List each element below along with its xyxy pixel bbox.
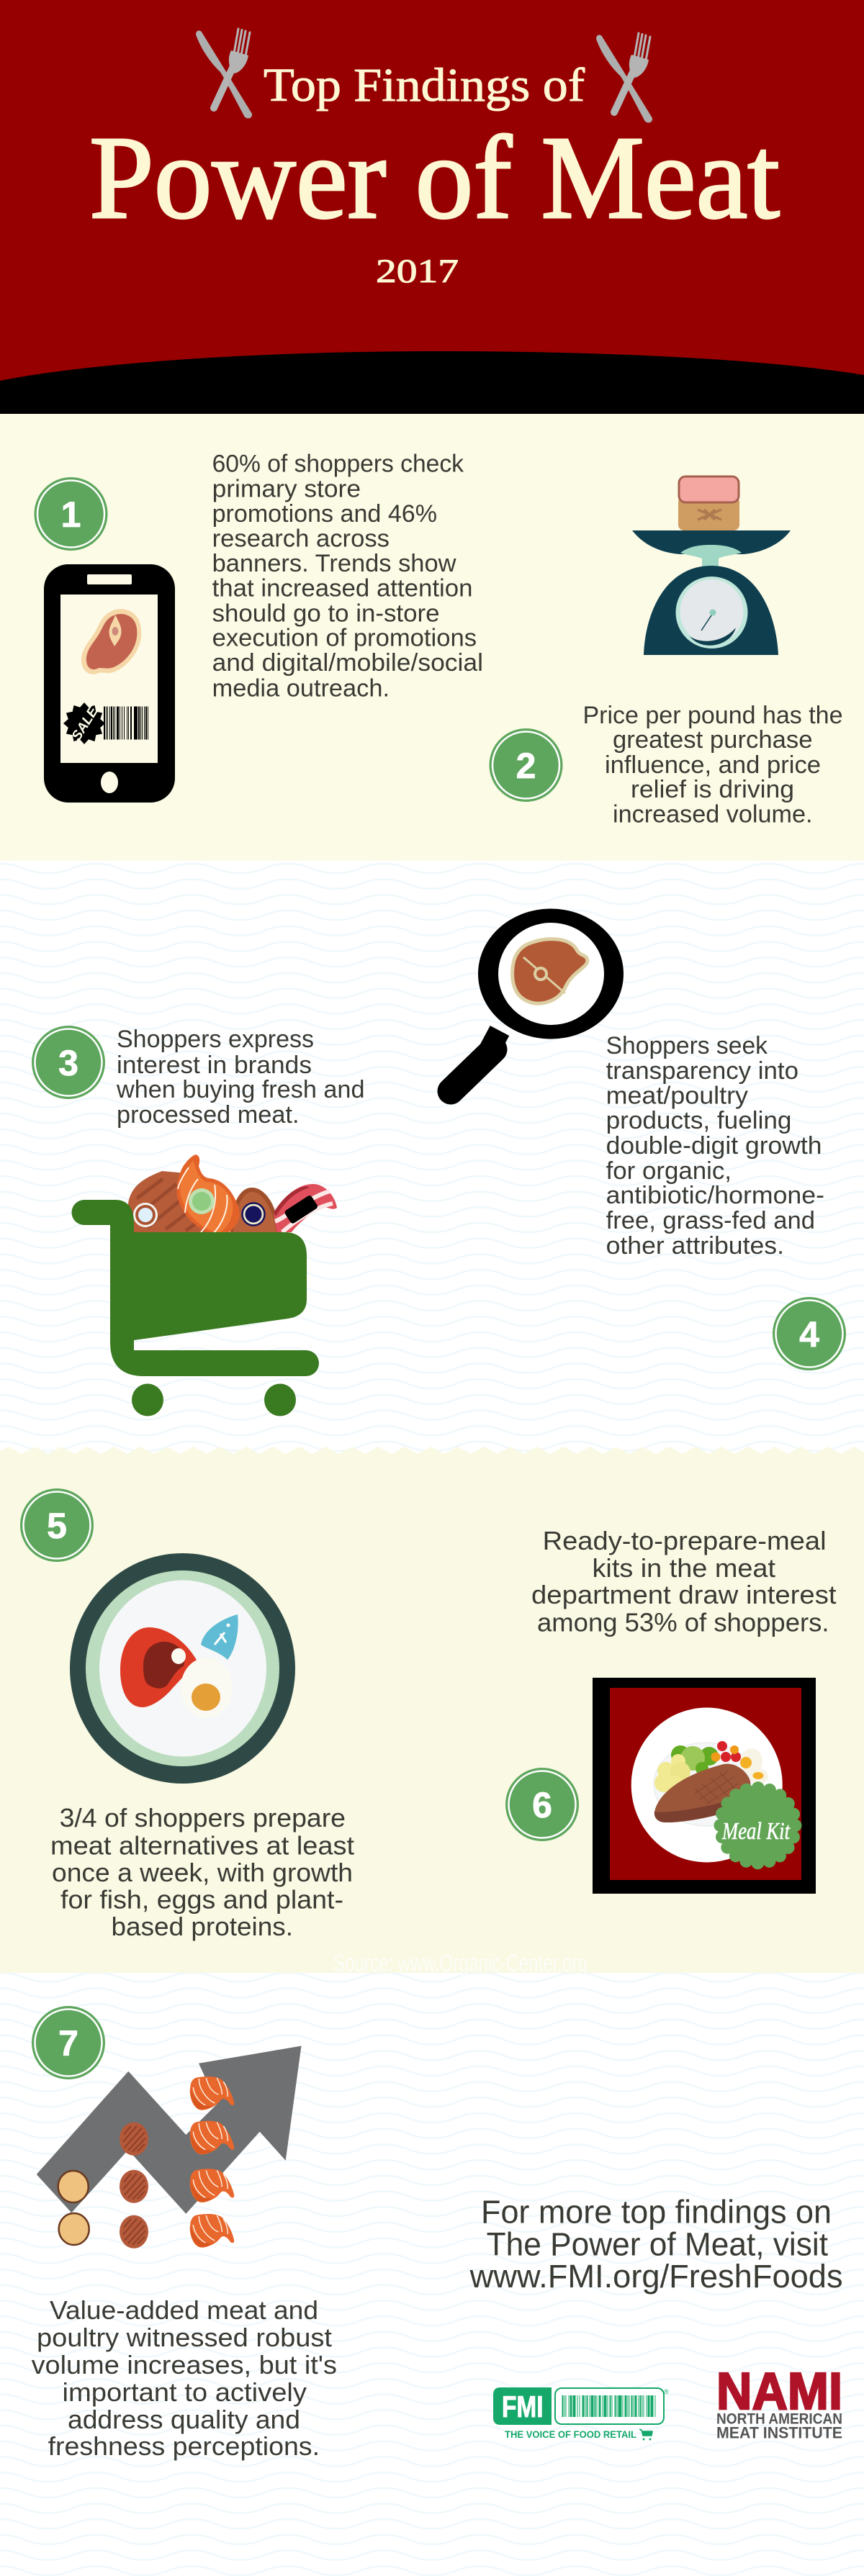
black plate arc xyxy=(0,351,864,414)
logo: FMI xyxy=(493,2387,669,2440)
text: finding 2: influence, and price xyxy=(605,751,821,779)
panel: finding 7 and footer xyxy=(32,2006,843,2461)
text: finding 1 xyxy=(212,451,483,702)
badge 4: 4 xyxy=(799,1314,819,1355)
text: finding 4: meat/poultry xyxy=(606,1083,748,1110)
logo: FMI: ® xyxy=(664,2388,669,2395)
text: finding 6: department draw interest xyxy=(531,1580,837,1609)
badge 7: 7 xyxy=(58,2023,78,2064)
text: call to action: www.FMI.org/FreshFoods xyxy=(469,2258,843,2295)
icon: phone with steak and sale barcode: SALE xyxy=(69,704,102,744)
text: finding 4: transparency into xyxy=(606,1057,798,1085)
panel: findings 5 and 6 xyxy=(0,1447,864,1977)
text: finding 6: kits in the meat xyxy=(592,1553,775,1583)
text: finding 1: should go to in-store xyxy=(212,600,439,627)
text: call to action: The Power of Meat, visit xyxy=(487,2225,828,2262)
text: call to action: For more top findings on xyxy=(481,2193,832,2230)
logo: NAMI: MEAT INSTITUTE xyxy=(716,2424,842,2441)
text: finding 5: 3/4 of shoppers prepare xyxy=(60,1803,346,1832)
badge 4 xyxy=(773,1297,846,1370)
text: finding 2: greatest purchase xyxy=(613,726,812,754)
text: finding 1: banners. Trends show xyxy=(212,550,456,577)
text: finding 4: free, grass-fed and xyxy=(606,1207,815,1234)
text: finding 4: products, fueling xyxy=(606,1107,792,1134)
year: 2017 xyxy=(376,253,459,290)
text: finding 4: antibiotic/hormone- xyxy=(606,1182,824,1209)
text: finding 1: primary store xyxy=(212,476,361,503)
panel: findings 1 and 2 xyxy=(0,414,864,861)
text: finding 5: once a week, with growth xyxy=(52,1858,353,1887)
text: finding 2: Price per pound has the xyxy=(583,702,842,729)
text: finding 1: promotions and 46% xyxy=(212,500,437,528)
title: Power of Meat xyxy=(89,112,780,243)
text: finding 4 xyxy=(606,1032,824,1260)
text: finding 1: 60% of shoppers check xyxy=(212,451,464,478)
icon: meal kit box xyxy=(593,1678,816,1894)
badge 7 xyxy=(32,2006,105,2079)
icon: plate with meat, fish and egg xyxy=(70,1553,295,1784)
badge 5: 5 xyxy=(47,1506,67,1546)
text: finding 7: important to actively xyxy=(62,2377,307,2407)
icon: rising zigzag arrow with patties and salmon xyxy=(37,2046,301,2249)
logo: NAMI: NORTH AMERICAN xyxy=(716,2411,842,2427)
faint source line: Source: www.Organic-Center.org xyxy=(333,1950,588,1977)
icon: shopping cart with meat xyxy=(72,1154,337,1416)
text: finding 2: relief is driving xyxy=(631,776,794,803)
icon: kitchen scale with meat package xyxy=(632,476,791,655)
badge 3: 3 xyxy=(58,1043,78,1083)
badge 6: 6 xyxy=(532,1785,552,1825)
header panel xyxy=(0,0,864,414)
text: finding 7: volume increases, but it's xyxy=(32,2350,337,2380)
text: call to action xyxy=(469,2193,843,2295)
text: finding 5 xyxy=(50,1803,354,1941)
badge 2: 2 xyxy=(516,746,536,786)
subtitle: Top Findings of xyxy=(264,59,585,112)
badge 2 xyxy=(490,728,563,802)
text: finding 1: execution of promotions xyxy=(212,625,477,652)
badge 6 xyxy=(505,1768,579,1841)
text: finding 4: Shoppers seek xyxy=(606,1032,768,1059)
text: finding 3 xyxy=(116,1026,365,1129)
text: finding 1: research across xyxy=(212,525,390,553)
logo: NAMI: NAMI xyxy=(716,2363,842,2421)
text: finding 5: meat alternatives at least xyxy=(50,1831,354,1860)
text: finding 5: based proteins. xyxy=(111,1912,293,1941)
icon: phone with steak and sale barcode xyxy=(44,564,175,803)
text: finding 6: Ready-to-prepare-meal xyxy=(543,1526,827,1555)
icon: magnifying glass over steak xyxy=(451,908,624,1091)
text: finding 7 xyxy=(32,2295,337,2461)
label: meal kit: Meal Kit xyxy=(721,1818,791,1845)
text: finding 2 xyxy=(583,702,842,828)
icon: right knife and fork xyxy=(596,33,652,122)
text: finding 3: when buying fresh and xyxy=(116,1076,365,1103)
text: finding 6 xyxy=(531,1526,837,1637)
text: finding 7: freshness perceptions. xyxy=(48,2431,320,2461)
badge 3 xyxy=(32,1026,105,1099)
badge 1: 1 xyxy=(61,494,81,535)
logo: FMI: FMI xyxy=(502,2390,543,2423)
logo: FMI: THE VOICE OF FOOD RETAIL xyxy=(505,2428,636,2440)
text: finding 1: media outreach. xyxy=(212,674,390,702)
text: finding 5: for fish, eggs and plant- xyxy=(60,1885,343,1915)
text: finding 7: address quality and xyxy=(68,2405,300,2434)
text: finding 4: double-digit growth xyxy=(606,1132,822,1160)
text: finding 2: increased volume. xyxy=(613,801,812,828)
text: finding 4: other attributes. xyxy=(606,1232,784,1260)
text: finding 6: among 53% of shoppers. xyxy=(537,1608,829,1637)
badge 1 xyxy=(35,477,108,551)
badge 5 xyxy=(20,1488,94,1562)
text: finding 3: Shoppers express xyxy=(117,1026,314,1053)
text: finding 1: that increased attention xyxy=(212,574,472,602)
text: finding 4: for organic, xyxy=(606,1157,732,1185)
text: finding 7: Value-added meat and xyxy=(50,2295,318,2325)
panel: findings 3 and 4 xyxy=(32,908,846,1416)
text: finding 3: interest in brands xyxy=(117,1052,312,1079)
text: finding 7: poultry witnessed robust xyxy=(37,2323,332,2352)
icon: left knife and fork xyxy=(196,29,252,118)
text: finding 3: processed meat. xyxy=(117,1101,300,1129)
text: finding 1: and digital/mobile/social xyxy=(212,649,483,677)
